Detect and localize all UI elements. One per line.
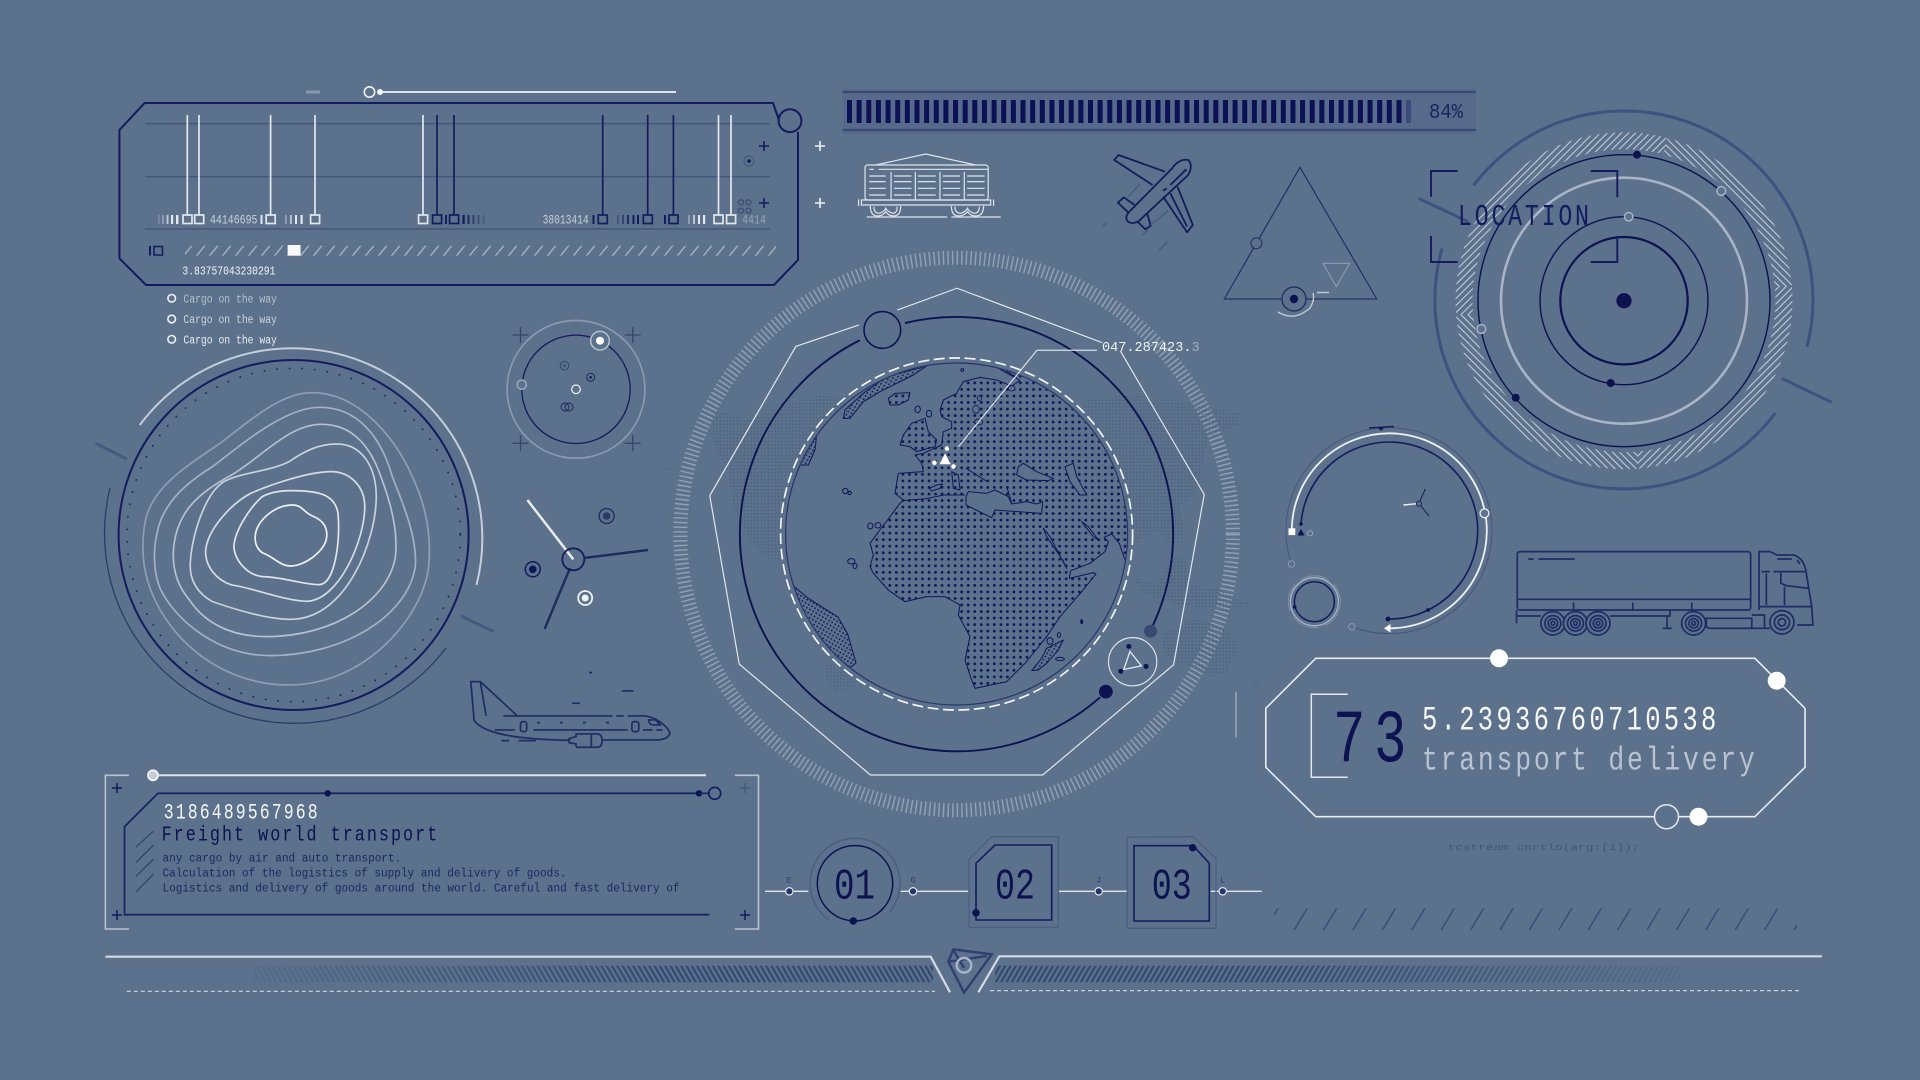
panel numeric labels: 38013414	[543, 214, 589, 228]
land: north east arctic coast	[998, 368, 1018, 378]
delivery frame	[1266, 658, 1805, 817]
panel value: 3.83757043230291	[182, 265, 275, 278]
coordinate readout: 047.287423.3	[1102, 340, 1200, 356]
frame nodes	[1490, 649, 1786, 829]
panel: freight world transport	[105, 770, 758, 929]
land: iceland	[888, 393, 910, 405]
numeric readout: 5.23936760710538	[1422, 702, 1720, 741]
panel numeric labels: 44146695	[210, 214, 258, 228]
ticks ring	[680, 258, 1233, 810]
status list: Cargo on the way	[183, 314, 277, 327]
freight title: Freight world transport	[162, 823, 439, 847]
freight slider	[148, 770, 706, 780]
icon: top plane	[1102, 155, 1193, 251]
freight description: Logistics and delivery of goods around the world. Careful and fast delivery of	[162, 883, 680, 896]
status list: Cargo on the way	[183, 334, 277, 347]
freight description: any cargo by air and auto transport.	[162, 853, 401, 866]
white signal markers	[183, 115, 736, 224]
step 01	[792, 821, 918, 946]
sea: mediterranean coast	[903, 495, 965, 501]
icon: airliner	[471, 673, 670, 747]
triangle badge	[1109, 638, 1157, 686]
step 03: 03	[1152, 862, 1192, 912]
location marker	[932, 350, 1097, 469]
footer bar	[105, 949, 1822, 993]
navy signal markers	[433, 115, 678, 224]
step connectors: L	[1220, 876, 1225, 886]
hatch marks	[136, 831, 154, 892]
chart: arc gauge	[1286, 426, 1492, 634]
status list: Cargo on the way	[183, 293, 277, 306]
step connectors: G	[910, 876, 916, 886]
panel grid lines	[145, 124, 770, 229]
dashed ring	[781, 358, 1133, 710]
delivery label: transport delivery	[1422, 742, 1758, 779]
earth	[775, 362, 1147, 705]
step 03	[1127, 837, 1216, 928]
land: madagascar	[1032, 640, 1063, 671]
freight description: Calculation of the logistics of supply and delivery of goods.	[162, 868, 566, 881]
icon: freight wagon	[859, 154, 1001, 217]
small target scope	[507, 320, 645, 458]
progress hatch	[149, 245, 776, 256]
panel: signal monitor	[119, 87, 825, 285]
footer hatch right	[995, 965, 1681, 983]
sea: eastern mediterranean	[966, 490, 1043, 518]
contour lines	[143, 393, 429, 685]
faint world map	[660, 393, 1259, 693]
panel side icons	[738, 141, 825, 213]
step 02: 02	[995, 862, 1035, 912]
freight description	[162, 853, 680, 896]
faint code line: tcstream cnrtlo(arg:[i]);	[1448, 843, 1640, 853]
icon: triangle radar	[1224, 167, 1377, 316]
land: sardinia	[929, 484, 942, 491]
seas: black sea, caspian, red sea, gulf	[1017, 463, 1098, 568]
step connectors: E	[786, 876, 792, 886]
location label: LOCATION	[1458, 200, 1592, 235]
value 73: 73	[1333, 700, 1406, 785]
land: south america	[794, 586, 856, 668]
icon: truck	[1517, 552, 1813, 635]
land: caribbean	[800, 435, 817, 465]
location brackets	[1431, 171, 1617, 262]
radar nodes	[1477, 151, 1726, 402]
lakes: baltic	[973, 386, 1015, 425]
outer frame polygon	[710, 288, 1204, 775]
footer logo	[948, 949, 992, 993]
chart: contour radar	[96, 348, 494, 723]
panel numeric labels	[210, 214, 766, 228]
small white barcodes	[158, 215, 705, 224]
navy frame	[112, 783, 750, 920]
panel numeric labels: 4414	[742, 214, 766, 228]
icon: propeller dial	[525, 500, 648, 629]
outer brackets	[105, 775, 758, 929]
land: eurasia and africa	[870, 362, 1147, 688]
step 01: 01	[834, 862, 875, 912]
value bracket	[1311, 694, 1348, 777]
land: uk	[900, 418, 937, 452]
contour rings and frame	[96, 348, 494, 723]
hatched ring	[1464, 141, 1784, 461]
orbit ring	[740, 312, 1173, 751]
percentage: 84%	[1429, 102, 1463, 125]
outer arcs	[1418, 111, 1832, 489]
land: greenland	[843, 366, 927, 418]
chart: globe	[660, 258, 1259, 810]
mini ring	[1288, 576, 1340, 628]
mini propeller	[1404, 489, 1429, 516]
bottom right slashes	[1236, 692, 1797, 930]
footer hatch left	[254, 965, 933, 983]
top slider	[306, 87, 676, 97]
small navy barcodes	[445, 215, 666, 224]
footer lines	[105, 956, 1822, 992]
freight number: 3186489567968	[164, 800, 320, 825]
step 02	[969, 837, 1058, 927]
progress bar	[842, 89, 1476, 134]
concentric rings	[1478, 155, 1770, 447]
small islands	[843, 369, 1083, 661]
chart: location radar	[1418, 111, 1832, 489]
land: italy outline	[952, 468, 1012, 503]
panel frame	[119, 103, 801, 285]
status list	[168, 293, 277, 347]
panel: transport delivery	[1266, 649, 1805, 853]
step connectors	[765, 876, 1262, 895]
step connectors: J	[1096, 876, 1101, 886]
